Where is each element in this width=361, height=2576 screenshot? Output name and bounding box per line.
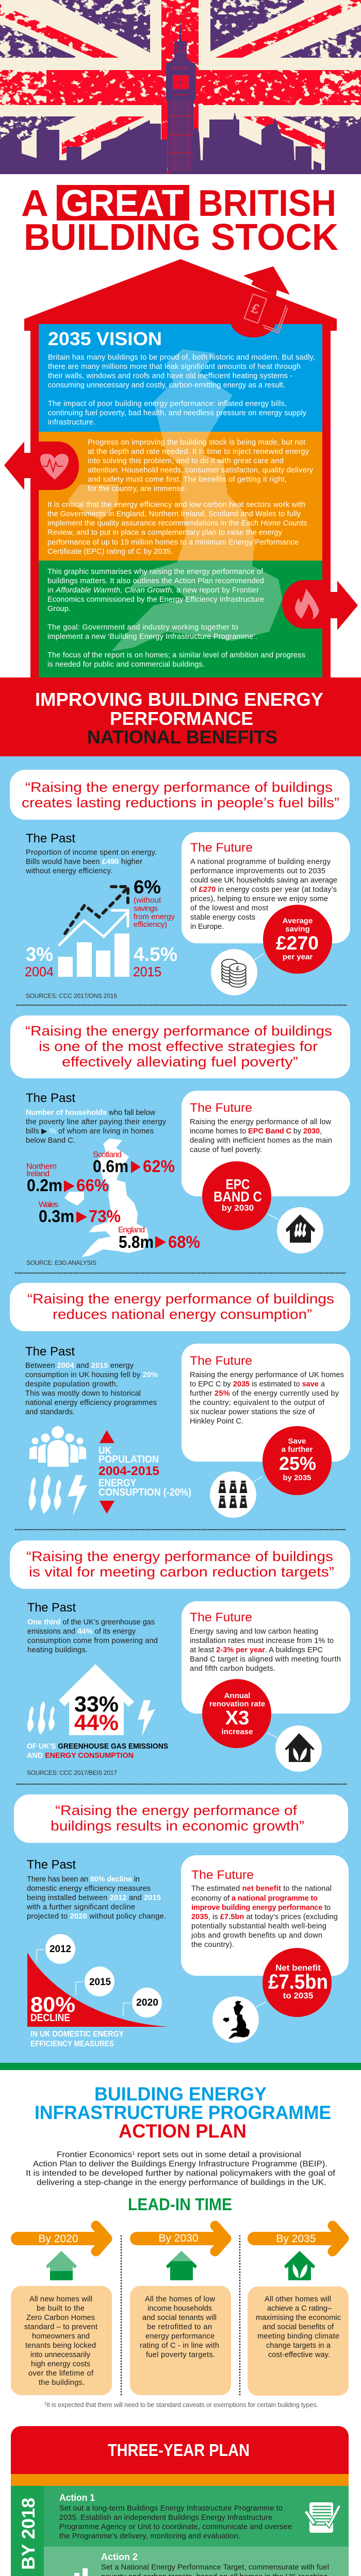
text: orange panel copy: into solving this problem, and to do it with great care and xyxy=(88,457,284,465)
the past: projected to 2020 without policy change. xyxy=(27,1912,166,1921)
title xyxy=(21,183,338,258)
the past: consumption come from powering and xyxy=(27,1637,158,1645)
quote xyxy=(10,1283,350,1331)
card: and social benefits of xyxy=(262,2323,334,2331)
card: into unnecessarily xyxy=(30,2351,91,2359)
the past: national energy efficiency programmes xyxy=(25,1399,157,1407)
quote: is one of the most effective strategies for xyxy=(39,1039,318,1054)
card: All other homes will xyxy=(265,2295,331,2303)
text: orange panel copy xyxy=(47,438,314,556)
icon: people xyxy=(29,1426,86,1467)
the past: One third of the UK’s greenhouse gas xyxy=(27,1618,155,1626)
uk map with fuel poverty figures: Wales xyxy=(39,1200,58,1209)
quote: buildings results in economic growth” xyxy=(51,1818,304,1834)
card: maximising the economic xyxy=(256,2314,341,2322)
the future: could see UK households saving an average xyxy=(190,876,337,885)
text: blue panel copy xyxy=(48,353,315,427)
text: orange panel copy: Progress on improving the building stock is being made, but not xyxy=(88,438,305,447)
text: orange panel copy: the Governments in England, Northern Ireland, Scotland and Wales to fully xyxy=(47,510,301,518)
header flag illustration xyxy=(0,0,361,174)
callout: renovation rate x3: X3 xyxy=(225,1707,249,1729)
the past: Between 2004 and 2015 energy xyxy=(25,1362,134,1370)
arrow: by 2030 xyxy=(137,2226,226,2251)
text: green panel copy: Economics commissioned by the Energy Efficiency Infrastructure xyxy=(47,596,264,604)
callout: renovation rate x3 xyxy=(202,1679,271,1748)
caption: greenhouse gas and energy xyxy=(27,1742,168,1760)
the past: domestic energy efficiency measures xyxy=(27,1885,151,1893)
chart: 80% decline curve: 2015 xyxy=(89,1977,111,1988)
action 1 xyxy=(44,2486,349,2547)
title: A xyxy=(21,183,48,224)
text: orange panel copy: and safety must come first. The benefits of getting it right, xyxy=(88,476,287,484)
arrow: by 2020: By 2020 xyxy=(38,2233,78,2245)
uk map watermark xyxy=(68,349,283,651)
the past: heating buildings. xyxy=(27,1646,88,1654)
the past: the poverty line after paying their energy xyxy=(26,1118,167,1126)
the future: The Future xyxy=(190,1101,252,1115)
the future xyxy=(181,1855,349,1976)
the past: despite population growth. xyxy=(25,1380,118,1388)
action 1: Set out a long-term Buildings Energy Infrastructure Programme to xyxy=(59,2504,283,2513)
icon: uk map xyxy=(212,1996,266,2043)
the future: Energy saving and low carbon heating xyxy=(190,1628,318,1636)
text: orange panel copy: attention. Household needs, consumer satisfacton, quality delivery xyxy=(88,466,314,474)
section banner: improving building energy performance: NATIONAL BENEFITS xyxy=(87,726,277,748)
caption: domestic energy efficiency measures: IN UK DOMESTIC ENERGY xyxy=(30,2030,124,2039)
callout: net benefit: £7.5bn xyxy=(268,1971,328,1993)
intro text: Frontier Economics xyxy=(57,2150,128,2159)
intro text: report sets out in some detail a provisional xyxy=(135,2150,301,2159)
quote xyxy=(14,1794,348,1843)
quote: effectively alleviating fuel poverty” xyxy=(62,1054,298,1070)
lead-in column: by 2020 xyxy=(11,2226,112,2395)
the future: installation rates must increase from 1% to xyxy=(190,1637,334,1645)
the past xyxy=(27,1601,158,1654)
uk map with fuel poverty figures: England xyxy=(118,1226,145,1234)
big ben tower xyxy=(166,17,195,174)
the future: A national programme of building energy xyxy=(190,858,331,866)
the past: The Past xyxy=(27,1601,76,1615)
uk map with fuel poverty figures: 0.3m xyxy=(39,1207,74,1226)
chart: 80% decline curve xyxy=(27,1934,169,2027)
card: be retrofitted to an xyxy=(147,2323,212,2331)
population vs energy graphic: POPULATION xyxy=(99,1454,159,1465)
arrow: by 2030: By 2030 xyxy=(158,2232,199,2244)
the future: further 25% of the energy currently used by xyxy=(190,1389,339,1398)
text: orange panel copy: implement the quality assurance recommendations in the Each Home Counts xyxy=(47,519,307,528)
the future: Band C target is aligned with meeting fourth xyxy=(190,1655,341,1664)
the past xyxy=(25,832,157,875)
caption: domestic energy efficiency measures xyxy=(30,2030,124,2048)
the future: dealing with inefficient homes as the main xyxy=(190,1137,332,1145)
the future: The Future xyxy=(190,1354,252,1368)
the past: Number of households who fall below xyxy=(26,1109,155,1117)
chart: 80% decline curve: 2012 xyxy=(50,1944,71,1955)
bar chart: income share: savings xyxy=(134,904,158,913)
the future: of the lowest and most xyxy=(190,904,268,912)
icon: banknotes xyxy=(231,293,288,337)
bar chart: income share: 3% xyxy=(26,944,53,965)
the past: The Past xyxy=(26,832,75,845)
the future: Raising the energy performance of UK homes xyxy=(190,1371,344,1379)
the past: The Past xyxy=(25,1345,75,1359)
text: green panel copy: Group. xyxy=(47,605,71,613)
text: green panel copy: is needed for public and commercial buildings. xyxy=(47,660,205,669)
icon: green house with leaf xyxy=(284,2251,315,2280)
callout: save a further 25%: Save xyxy=(288,1437,306,1446)
intro text xyxy=(26,2150,336,2187)
benefit 1: fuel bills xyxy=(10,770,350,999)
text: orange panel copy: at the depth and rate needed. It is time to inject renewed energy xyxy=(88,448,309,456)
icon: coins xyxy=(211,949,265,995)
text: orange panel copy: for the country, are immense. xyxy=(88,485,187,493)
arrow: money out through roof xyxy=(243,266,290,296)
icon: house one third built xyxy=(46,2251,77,2280)
callout: net benefit xyxy=(262,1948,332,2017)
text: green panel copy: This graphic summarises why raising the energy performance of xyxy=(47,568,264,576)
callout: renovation rate x3: increase xyxy=(222,1727,253,1736)
action 2: Action 2 xyxy=(101,2552,138,2562)
panel: three-year plan xyxy=(10,2426,349,2576)
arrow: by 2035 xyxy=(254,2226,344,2251)
population vs energy graphic: 2004-2015 xyxy=(99,1464,159,1478)
benefit 5: economic growth xyxy=(14,1794,349,2048)
the future: income homes to EPC Band C by 2030, xyxy=(190,1127,322,1136)
callout: epc band c: by 2030 xyxy=(222,1203,254,1213)
intro text: It is intended to be developed further by national policymakers with the goal of xyxy=(26,2169,336,2178)
the future: jobs and growth benefits up and down xyxy=(191,1931,322,1940)
tab: by 2018: BY 2018 xyxy=(19,2498,39,2570)
sources: SOURCES: CCC 2017/ONS 2016 xyxy=(26,992,117,999)
the future xyxy=(182,1344,350,1462)
uk map with fuel poverty figures: 0.6m xyxy=(93,1157,128,1176)
caption: domestic energy efficiency measures: EFFICIENCY MEASURES xyxy=(30,2040,114,2048)
title: GREAT xyxy=(61,183,184,224)
tab: by 2018 xyxy=(11,2486,44,2576)
footnote: It is expected that there will need to be standard caveats or exemptions for certain building types. xyxy=(46,2401,318,2409)
the past: The Past xyxy=(26,1091,75,1105)
bar chart: income share: 2015 xyxy=(133,964,161,979)
blue panel xyxy=(39,324,322,432)
intro text: delivering a step-change in the energy performance of buildings in the UK. xyxy=(37,2178,326,2187)
text: green panel copy: in Affordable Warmth, Clean Growth, a new report by Frontier xyxy=(47,586,259,595)
action 2 xyxy=(44,2547,349,2576)
intro text: Action Plan to deliver the Buildings Energy Infrastructure Programme (BEIP). xyxy=(33,2160,327,2168)
text: green panel copy: implement a new ‘Building Energy Infrastructure Programme’. xyxy=(47,633,257,641)
the future: six nuclear power stations the size of xyxy=(190,1408,315,1416)
uk map with fuel poverty figures: 68% xyxy=(168,1232,200,1251)
the past xyxy=(26,1858,166,1921)
icon: house two thirds built xyxy=(166,2251,197,2280)
uk map with fuel poverty figures: Northern xyxy=(26,1162,57,1171)
text: blue panel copy: there are many millions more that leak significant amounts of heat through xyxy=(48,363,301,371)
text: orange panel copy: Review, and to put in place a complementary plan to raise the energy xyxy=(47,529,283,537)
the past: Bills would have been £490 higher xyxy=(26,858,142,866)
section banner: improving building energy performance xyxy=(0,677,361,756)
title: BUILDING STOCK xyxy=(24,217,338,258)
arrow: by 2020 xyxy=(18,2226,107,2251)
section banner: improving building energy performance: PERFORMANCE xyxy=(110,708,253,729)
the future: The Future xyxy=(190,1611,252,1624)
quote: “Raising the energy performance of buildings xyxy=(26,1549,333,1564)
quote: “Raising the energy performance of buildings xyxy=(25,779,333,795)
card: over the lifetime of xyxy=(28,2369,94,2378)
title: BRITISH xyxy=(198,183,336,224)
the past: consumption in UK housing fell by 20% xyxy=(25,1371,158,1379)
text: blue panel copy: infrastructure. xyxy=(48,418,95,427)
bar chart: income share: 6% xyxy=(134,876,161,897)
population vs energy graphic xyxy=(99,1430,191,1514)
text: green panel copy xyxy=(47,568,305,669)
card xyxy=(248,2286,349,2396)
card: be built to the xyxy=(37,2304,85,2313)
icon: coins: £ xyxy=(236,965,239,972)
text: green panel copy: The goal: Government and industry working together to xyxy=(47,623,238,632)
the future xyxy=(182,1601,350,1714)
national benefits background xyxy=(0,756,361,2063)
title: action plan: BUILDING ENERGY xyxy=(94,2083,267,2105)
the future: cause of fuel poverty. xyxy=(190,1146,262,1154)
card: rating of C - in line with xyxy=(140,2342,219,2350)
sources: SOURCES: CCC 2017/BEIS 2017 xyxy=(27,1769,117,1776)
callout: epc band c: EPC xyxy=(226,1176,250,1192)
callout: average saving: saving xyxy=(285,925,310,934)
the future: The Future xyxy=(191,1868,254,1882)
callout: save a further 25%: a further xyxy=(282,1445,313,1454)
caption: greenhouse gas and energy: AND ENERGY CONSUMPTION xyxy=(27,1751,134,1760)
the past: below Band C. xyxy=(26,1137,75,1145)
the past: This was mostly down to historical xyxy=(25,1389,141,1398)
heading: 2035 vision: 2035 VISION xyxy=(48,328,162,349)
london skyline xyxy=(0,112,361,174)
icon: checklist xyxy=(306,2502,340,2533)
text: blue panel copy: consuming unnecessary and costly, carbon-emitting energy as a result. xyxy=(48,381,285,389)
callout: save a further 25%: 25% xyxy=(279,1453,316,1474)
text: blue panel copy: continuing fuel poverty, bad health, and needless pressure on energy supply xyxy=(48,409,307,417)
the future: to EPC C by 2035 is estimated to save a xyxy=(190,1380,325,1388)
population vs energy graphic: ENERGY xyxy=(99,1478,137,1489)
text: orange panel copy: performance of up to 19 million homes to a minimum Energy Performance xyxy=(47,538,299,547)
the future: 2035, is £7.5bn at today’s prices (excluding xyxy=(191,1913,338,1921)
the past: Proportion of income spent on energy. xyxy=(26,849,157,857)
uk map with fuel poverty figures: 73% xyxy=(89,1207,121,1226)
card: achieve a C rating– xyxy=(267,2304,332,2313)
chart: 80% decline curve: 80% xyxy=(30,1992,75,2016)
card: Zero Carbon Homes xyxy=(26,2314,95,2322)
uk map with fuel poverty figures xyxy=(26,1139,200,1257)
intro text: 1 xyxy=(132,2150,135,2156)
card: standard – to prevent xyxy=(24,2323,97,2331)
benefit 2: fuel poverty xyxy=(10,1015,350,1266)
the future: improve building energy performance to xyxy=(191,1904,331,1912)
icon: rising bars xyxy=(58,2568,88,2576)
card: All the homes of low xyxy=(145,2295,215,2303)
the future: the country). xyxy=(191,1941,234,1949)
bar chart: income share: (without xyxy=(134,896,161,905)
the future: The Future xyxy=(190,841,253,855)
callout: net benefit: to 2035 xyxy=(283,1991,313,2001)
bar chart: income share: 4.5% xyxy=(134,944,177,965)
the future: the country; equivalent to the output of xyxy=(190,1399,325,1407)
population vs energy graphic: CONSUPTION (-20%) xyxy=(99,1487,191,1498)
action 1: Action 1 xyxy=(59,2493,95,2503)
caption: greenhouse gas and energy: OF UK’S GREENHOUSE GAS EMISSIONS xyxy=(27,1742,168,1751)
the future: at least 2-3% per year. A buildings EPC xyxy=(190,1646,323,1654)
the past xyxy=(26,1091,167,1145)
card: All new homes will xyxy=(29,2295,92,2303)
quote: “Raising the energy performance of buildings xyxy=(27,1291,334,1307)
icon: heat and power xyxy=(29,1475,87,1516)
text: blue panel copy: their walls, windows and roofs and have old inefficient heating systems - xyxy=(48,372,292,380)
icon: six cooling towers xyxy=(210,1471,263,1518)
bar chart: income share: 2004 xyxy=(25,964,54,979)
chart: 80% decline curve: 2020 xyxy=(136,1997,158,2008)
quote: creates lasting reductions in people’s fuel bills” xyxy=(22,795,339,810)
callout: average saving: Average xyxy=(283,917,313,925)
footnote: 1 xyxy=(44,2401,47,2406)
bar chart: income share xyxy=(25,876,177,979)
plan header xyxy=(11,2426,349,2474)
card xyxy=(130,2286,231,2395)
population vs energy graphic: UK xyxy=(99,1445,111,1456)
bar chart: income share: efficiency) xyxy=(134,920,167,929)
house outline xyxy=(24,259,337,677)
action 1: 2035. Establish an independent Buildings Energy Infrastructure xyxy=(59,2514,272,2522)
the past xyxy=(25,1345,158,1416)
callout: renovation rate x3: renovation rate xyxy=(209,1700,265,1708)
callout: save a further 25%: by 2035 xyxy=(283,1473,311,1482)
card: the buildings. xyxy=(39,2379,85,2387)
icon: banknotes: £ xyxy=(249,300,262,317)
the future: Hinkley Point C. xyxy=(190,1417,243,1426)
the future: economy of a national programme to xyxy=(191,1894,318,1903)
action 1: Programme Agency or Unit to coordinate, communicate and oversee xyxy=(59,2523,292,2531)
house graphic: 33% and 44% xyxy=(27,1664,155,1736)
uk map with fuel poverty figures: Scotland xyxy=(93,1150,122,1159)
the future: potentially substantial health well-being xyxy=(191,1922,326,1930)
callout: net benefit: Net benefit xyxy=(275,1963,321,1973)
bar chart: income share: from energy xyxy=(134,912,175,921)
green panel xyxy=(39,561,322,677)
text: blue panel copy: The impact of poor building energy performance: inflated energy bills, xyxy=(48,400,287,408)
icon: flame arrow right xyxy=(282,580,358,630)
uk map with fuel poverty figures: 62% xyxy=(143,1157,175,1176)
card: high energy costs xyxy=(31,2360,90,2368)
title: action plan: INFRASTRUCTURE PROGRAMME xyxy=(35,2102,331,2123)
the past: and standards. xyxy=(25,1408,75,1416)
house panel: 2035 vision xyxy=(4,259,358,677)
the future: prices), helping to ensure we enjoy some xyxy=(190,895,328,903)
text: blue panel copy: Britain has many buildings to be proud of, both historic and modern. But sadly, xyxy=(48,353,315,362)
quote xyxy=(10,770,350,820)
card xyxy=(11,2286,112,2395)
card: and social tenants will xyxy=(142,2314,217,2322)
the future: and fifth carbon budgets. xyxy=(190,1665,275,1673)
orange panel xyxy=(39,432,322,561)
callout: epc band c: BAND C xyxy=(214,1189,262,1205)
text: green panel copy: buildings matters. It also outlines the Action Plan recommended xyxy=(47,577,264,585)
card: tenants being locked xyxy=(25,2342,96,2350)
section banner: improving building energy performance: IMPROVING BUILDING ENERGY xyxy=(35,689,323,710)
callout: average saving xyxy=(263,905,332,974)
title: action plan: ACTION PLAN xyxy=(119,2121,247,2142)
the future: of £270 in energy costs per year (at today’s xyxy=(190,886,337,894)
card: energy performance xyxy=(145,2332,215,2341)
the past: with a further significant decline xyxy=(26,1903,135,1911)
quote xyxy=(10,1015,350,1078)
house graphic: 33% and 44%: 44% xyxy=(74,1710,119,1735)
action 2: Set a National Energy Performance Target, commensurate with fuel xyxy=(101,2564,329,2572)
icon: heart arrow left xyxy=(4,442,79,490)
plan header: THREE-YEAR PLAN xyxy=(108,2441,250,2460)
icon: heated house xyxy=(269,1207,323,1253)
green divider band xyxy=(0,2063,361,2070)
uk map with fuel poverty figures: 0.2m xyxy=(27,1176,62,1195)
source: SOURCE: E3G ANALYSIS xyxy=(26,1259,96,1266)
the past: being installed between 2012 and 2015 xyxy=(27,1894,161,1902)
text: green panel copy: The focus of the report is on homes; a similar level of ambition and progress xyxy=(47,651,305,659)
the future: in Europe. xyxy=(190,923,224,931)
benefit 4: carbon targets xyxy=(10,1540,350,1776)
quote xyxy=(10,1540,350,1589)
the future xyxy=(182,1091,350,1196)
action 1: the Programme’s delivery, monitoring and evaluation. xyxy=(59,2532,240,2540)
the future xyxy=(182,832,350,943)
benefit 3: energy consumption xyxy=(10,1283,350,1518)
the past: bills ▶ % of whom are living in homes xyxy=(26,1127,154,1136)
lead-in column: by 2035 xyxy=(248,2226,349,2396)
quote: is vital for meeting carbon reduction targets” xyxy=(29,1564,334,1580)
quote: “Raising the energy performance of xyxy=(55,1803,298,1818)
callout: epc band c xyxy=(202,1161,271,1230)
the future: stable energy costs xyxy=(190,913,255,922)
uk map with fuel poverty figures: Ireland xyxy=(26,1170,50,1178)
quote: reduces national energy consumption” xyxy=(53,1307,312,1322)
card: fuel poverty targets. xyxy=(146,2351,215,2359)
the past: There has been an 80% decline in xyxy=(27,1875,140,1884)
uk map with fuel poverty figures: 5.8m xyxy=(119,1232,154,1251)
card: income households xyxy=(147,2304,212,2313)
heading: lead-in time: LEAD-IN TIME xyxy=(128,2195,232,2214)
text: orange panel copy: It is critical that the energy efficiency and low carbon heat sectors work with xyxy=(47,501,305,509)
the future: Raising the energy performance of all low xyxy=(190,1118,331,1126)
the past: The Past xyxy=(27,1858,76,1872)
chart: 80% decline curve: DECLINE xyxy=(30,2012,70,2024)
the past: without energy efficiency. xyxy=(25,867,112,875)
title: action plan xyxy=(35,2083,331,2142)
card: meeting binding climate xyxy=(257,2332,339,2341)
arrow: by 2035: By 2035 xyxy=(276,2233,316,2245)
uk map with fuel poverty figures: 66% xyxy=(76,1176,109,1195)
the future: performance improvements out to 2035 xyxy=(190,867,325,875)
callout: average saving: per year xyxy=(283,953,313,961)
house graphic: 33% and 44%: 33% xyxy=(74,1692,119,1717)
card: cost-effective way. xyxy=(268,2351,330,2359)
callout: save a further 25% xyxy=(262,1426,332,1495)
card: homeowners and xyxy=(32,2332,90,2341)
the future: The estimated net benefit to the national xyxy=(191,1885,332,1893)
quote: “Raising the energy performance of buildings xyxy=(25,1023,332,1039)
callout: renovation rate x3: Annual xyxy=(224,1691,250,1700)
icon: green house xyxy=(268,1725,322,1772)
lead-in column: by 2030 xyxy=(130,2226,231,2395)
the past: emissions and 44% of its energy xyxy=(27,1628,136,1636)
card: change targets in a xyxy=(266,2342,331,2350)
callout: average saving: £270 xyxy=(276,933,319,954)
text: orange panel copy: Certificate (EPC) rating of C by 2035. xyxy=(47,548,173,556)
